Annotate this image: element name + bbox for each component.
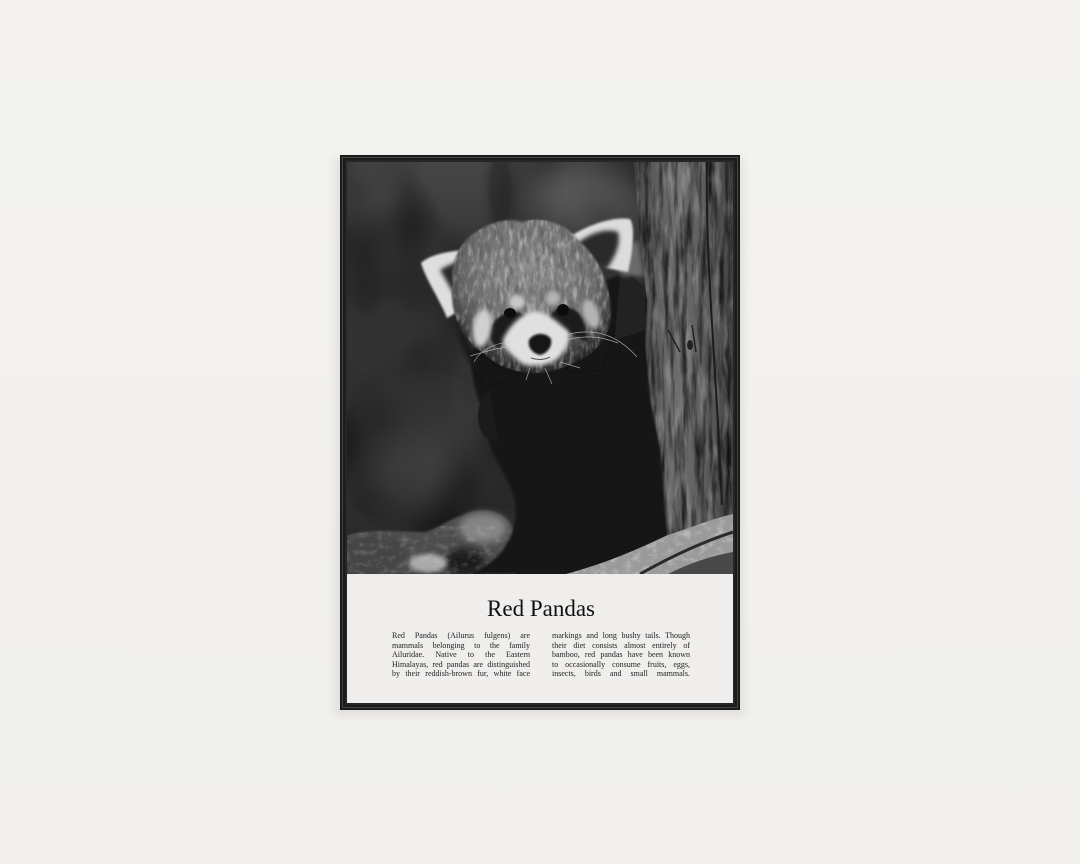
frame shadow on wall (334, 158, 744, 716)
dark fur under the cheeks (458, 322, 610, 368)
tree trunk (634, 162, 733, 536)
panda head (448, 216, 637, 384)
tree branch (560, 510, 733, 574)
poster illustration: wall, frame and red panda photograph (334, 155, 744, 716)
nose (529, 334, 551, 355)
white eyebrow marks (509, 295, 525, 309)
eyes (504, 308, 516, 318)
white cheek marks (470, 308, 494, 348)
light patch behind right ear (612, 240, 644, 276)
body text left column: Ailuridae. Native to the Eastern (392, 650, 530, 659)
body text right column: bamboo, red pandas have been known (552, 650, 690, 659)
body text right column: insects, birds and small mammals. (552, 669, 690, 678)
panda left ear (420, 249, 460, 319)
body text left column: mammals belonging to the family (392, 640, 530, 650)
body text right column: to occasionally consume fruits, eggs, (552, 660, 690, 668)
body text left column: Red Pandas (Ailurus fulgens) are (392, 631, 530, 640)
log and tail (343, 510, 522, 576)
title: Red Pandas (487, 596, 595, 621)
black poster frame (340, 155, 740, 710)
blurred forest background (347, 162, 644, 530)
panda right ear (568, 218, 633, 272)
body text left column: Himalayas, red pandas are distinguished (392, 660, 530, 668)
body text left column: by their reddish-brown fur, white face (392, 669, 530, 678)
dark eye patches (490, 312, 528, 348)
white caption panel (347, 574, 733, 703)
whiskers (470, 332, 637, 384)
body text right column: markings and long bushy tails. Though (552, 631, 690, 640)
photograph of red panda (343, 150, 733, 576)
body text right column (552, 631, 690, 678)
mouth (531, 357, 550, 359)
panda body (470, 270, 668, 574)
white muzzle (503, 311, 569, 366)
body text right column: their diet consists almost entirely of (552, 640, 690, 650)
body text left column (392, 631, 530, 678)
